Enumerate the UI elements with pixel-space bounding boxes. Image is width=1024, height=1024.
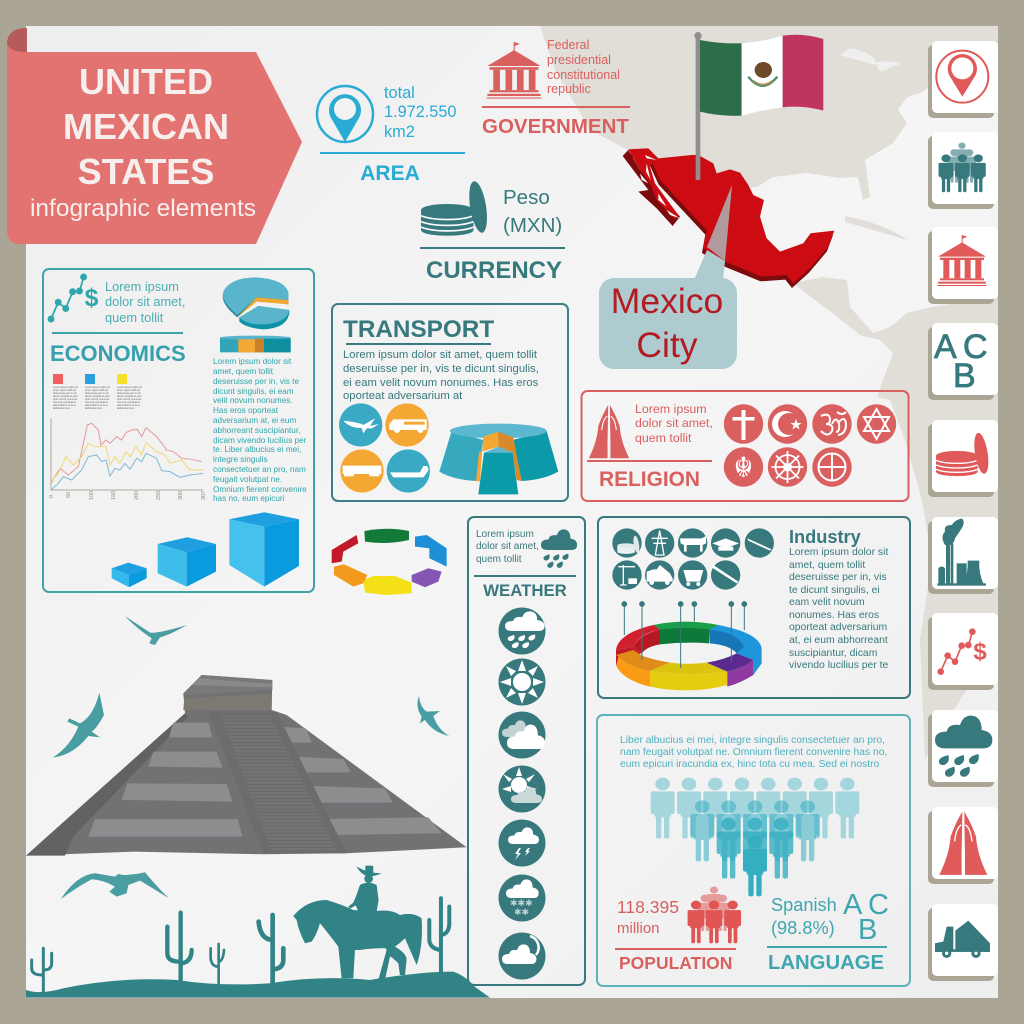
line chart: 250 xyxy=(156,491,162,500)
economics intro: Lorem ipsum xyxy=(105,279,179,294)
tile: area xyxy=(928,41,998,118)
icon: coins xyxy=(421,180,490,236)
sidebar icon tiles xyxy=(928,41,998,981)
icon: praying hands xyxy=(589,405,629,458)
chart legend: deseruisse per in vis xyxy=(117,391,141,395)
economics body text: Omnium fierent convenire xyxy=(213,485,307,494)
line chart: 0 xyxy=(49,495,55,498)
weather icons: ✱✱ xyxy=(514,907,529,917)
title text: MEXICAN xyxy=(63,106,229,147)
industry text: at, ei eum abhorreant xyxy=(789,635,888,646)
line chart xyxy=(49,418,207,500)
chart legend: has eros oporteat at xyxy=(53,400,76,404)
industry text: deseruisse per in, vis xyxy=(789,572,887,583)
horse and rider silhouette xyxy=(293,866,422,980)
economics body text: abhorreant suscipiantur, xyxy=(213,426,300,435)
chart legend: amet, quem tollit per xyxy=(85,388,109,392)
industry text: suscipiantur, dicam xyxy=(789,648,877,659)
desert ground with cacti xyxy=(26,898,490,998)
economics intro: quem tollit xyxy=(105,310,164,325)
panel: weather xyxy=(468,517,585,985)
area value: total xyxy=(384,84,415,102)
government type: constitutional xyxy=(547,68,620,82)
area block xyxy=(317,84,465,185)
currency block xyxy=(420,180,565,284)
chart legend: has eros oporteat at xyxy=(85,400,108,404)
economics body text: te. Liber albucius ei mei, xyxy=(213,445,301,454)
tile: weather xyxy=(928,710,998,787)
industry text: Lorem ipsum dolor sit xyxy=(789,547,888,558)
callout: Mexico City: City xyxy=(636,325,698,365)
flag pole xyxy=(696,36,700,180)
government type: Federal xyxy=(547,38,589,52)
transport icons xyxy=(339,403,430,493)
3D segmented cylinder xyxy=(439,424,558,494)
industry heading: Industry xyxy=(789,527,862,547)
economics body text: Lorem ipsum dolor sit xyxy=(213,357,292,366)
weather text: dolor sit amet, xyxy=(476,541,539,552)
area heading: AREA xyxy=(360,162,420,185)
ring chart with pins xyxy=(616,602,762,690)
title banner xyxy=(7,28,302,244)
panel: economics xyxy=(43,269,314,592)
tile: language: B xyxy=(953,357,976,395)
economics body text: Has eros oporteat xyxy=(213,406,279,415)
transport text: oporteat adversarium at xyxy=(343,390,463,402)
world map background xyxy=(540,26,998,760)
industry text: vivendo lucilius per te xyxy=(789,660,889,671)
industry text: eam velit novum xyxy=(789,597,865,608)
transport text: deseruisse per in, vis te dicunt singulis, xyxy=(343,363,539,375)
panel: transport xyxy=(332,304,568,501)
icon: government building xyxy=(487,42,541,99)
chart legend: adversarium ei eum xyxy=(53,403,76,407)
religious symbols: ☬ xyxy=(734,451,753,484)
population value: million xyxy=(617,920,660,937)
birds xyxy=(53,616,449,899)
icon: location pin xyxy=(317,86,373,142)
economics body text: velit novum nonumes. xyxy=(213,396,293,405)
line chart: 150 xyxy=(111,491,117,500)
chart legend: adversarium ei eum xyxy=(117,403,140,407)
icon: people group red xyxy=(688,886,741,943)
weather icons: ✱✱✱ xyxy=(510,898,533,908)
language value: Spanish xyxy=(771,895,837,915)
chart legend: dicunt singulis ei eam xyxy=(53,394,78,398)
chart legend: has eros oporteat at xyxy=(117,400,140,404)
pie chart xyxy=(223,277,289,329)
weather icons xyxy=(498,608,546,980)
industry icons xyxy=(612,528,774,590)
icon: rain cloud xyxy=(541,529,577,568)
population text: Liber albucius ei mei, integre singulis consectetuer an pro, xyxy=(620,735,885,746)
line chart: 300 xyxy=(178,491,184,500)
panel: industry xyxy=(598,517,910,698)
government block xyxy=(482,38,630,138)
tile: government xyxy=(928,227,998,304)
government heading: GOVERNMENT xyxy=(482,115,629,138)
weather text: quem tollit xyxy=(476,554,522,565)
title text: UNITED xyxy=(79,61,213,102)
economics body text: integre singulis xyxy=(213,455,268,464)
chart legend: velit novum nonumes xyxy=(85,397,110,401)
line chart: 100 xyxy=(89,491,95,500)
subtitle: infographic elements xyxy=(30,195,256,222)
chart legend: Lorem ipsum dolor sit xyxy=(85,385,110,389)
title text: STATES xyxy=(78,151,214,192)
tile: language xyxy=(928,323,998,400)
icon: letters ABC: A xyxy=(843,889,863,921)
chart legend: dicunt singulis ei eam xyxy=(117,394,142,398)
icon: letters ABC: C xyxy=(868,889,889,921)
tile: industry xyxy=(928,517,998,594)
panel: population and language xyxy=(597,715,910,986)
government type: republic xyxy=(547,82,591,96)
economics body text: dicam vivendo lucilius per xyxy=(213,436,307,445)
chart legend: velit novum nonumes xyxy=(117,397,142,401)
economics body text: amet, quem tollit xyxy=(213,367,274,376)
callout: Mexico City: Mexico xyxy=(611,281,723,321)
currency name: (MXN) xyxy=(503,214,562,237)
tile: currency xyxy=(928,420,998,497)
area value: km2 xyxy=(384,123,415,141)
chart legend: adversarium ei eum xyxy=(85,403,108,407)
economics body text: dicunt singulis, ei eam xyxy=(213,387,294,396)
industry text: te dicunt singulis, ei xyxy=(789,585,880,596)
chart legend: dicunt singulis ei eam xyxy=(85,394,110,398)
chart legend: deseruisse per in vis xyxy=(53,391,77,395)
chart legend: abhorreant sus xyxy=(53,406,71,410)
broken ring chart xyxy=(332,529,447,595)
government type: presidential xyxy=(547,53,611,67)
tile: population xyxy=(928,132,998,209)
icon: letters ABC: B xyxy=(858,914,877,946)
economics body text: feugait volutpat ne. xyxy=(213,475,282,484)
chart legend: Lorem ipsum dolor sit xyxy=(117,385,142,389)
transport text: Lorem ipsum dolor sit amet, quem tollit xyxy=(343,349,538,361)
weather heading: WEATHER xyxy=(483,581,567,600)
economics body text: deseruisse per in, vis te xyxy=(213,377,299,386)
tile: language: C xyxy=(963,328,988,366)
panel: religion xyxy=(582,391,908,501)
economics heading: ECONOMICS xyxy=(50,341,186,366)
cube bars xyxy=(112,512,299,587)
flag of Mexico xyxy=(700,35,823,116)
callout: Mexico City xyxy=(599,185,737,369)
tile: mining truck xyxy=(928,904,998,981)
language heading: LANGUAGE xyxy=(768,952,884,974)
industry text: oporteat adversarium xyxy=(789,622,887,633)
chart legend: abhorreant sus xyxy=(85,406,103,410)
line chart: 200 xyxy=(134,491,140,500)
chart legend: Lorem ipsum dolor sit xyxy=(53,385,78,389)
people chart xyxy=(651,778,859,896)
chart legend: amet, quem tollit per xyxy=(53,388,77,392)
chart legend: deseruisse per in vis xyxy=(85,391,109,395)
pyramid of Kukulcan xyxy=(26,675,467,856)
population value: 118.395 xyxy=(617,897,679,917)
chart legend xyxy=(53,374,142,410)
chart legend: velit novum nonumes xyxy=(53,397,78,401)
transport text: ei eam velit novum nonumes. Has eros xyxy=(343,377,539,389)
currency name: Peso xyxy=(503,186,550,209)
tile: religion xyxy=(928,807,998,884)
religious symbols xyxy=(724,404,896,487)
language value: (98.8%) xyxy=(771,918,835,938)
economics body text: has no, eum epicuri xyxy=(213,494,285,503)
religion text: dolor sit amet, xyxy=(635,416,713,430)
weather text: Lorem ipsum xyxy=(476,529,534,540)
transport heading: TRANSPORT xyxy=(343,316,494,343)
stacked cylinder chart xyxy=(220,336,291,352)
industry text: amet, quem tollit xyxy=(789,560,865,571)
population text: nam feugait volutpat ne. Omnium fierent convenire has no, xyxy=(620,747,887,758)
population text: eum epicuri iracundia ex, hinc tota cu mea. Sed ei nostro xyxy=(620,759,880,770)
icon: chart with dollar xyxy=(48,274,98,322)
currency heading: CURRENCY xyxy=(426,257,562,284)
industry text: nonumes. Has eros xyxy=(789,610,879,621)
religion heading: RELIGION xyxy=(599,468,700,491)
tile: language: A xyxy=(934,328,957,366)
area value: 1.972.550 xyxy=(384,103,456,121)
chart legend: amet, quem tollit per xyxy=(117,388,141,392)
line chart: 307 xyxy=(201,491,207,500)
line chart: 50 xyxy=(66,492,72,498)
map of Mexico with flag and callout xyxy=(599,32,834,369)
religion text: quem tollit xyxy=(635,431,692,445)
economics body text: adversarium at, ei eum xyxy=(213,416,296,425)
chart legend: abhorreant sus xyxy=(117,406,135,410)
economics body text: consectetuer an pro, nam xyxy=(213,465,306,474)
tile: economics xyxy=(928,613,998,690)
population heading: POPULATION xyxy=(619,953,732,973)
map: Mexico xyxy=(623,32,834,288)
religion text: Lorem ipsum xyxy=(635,402,707,416)
economics intro: dolor sit amet, xyxy=(105,294,185,309)
